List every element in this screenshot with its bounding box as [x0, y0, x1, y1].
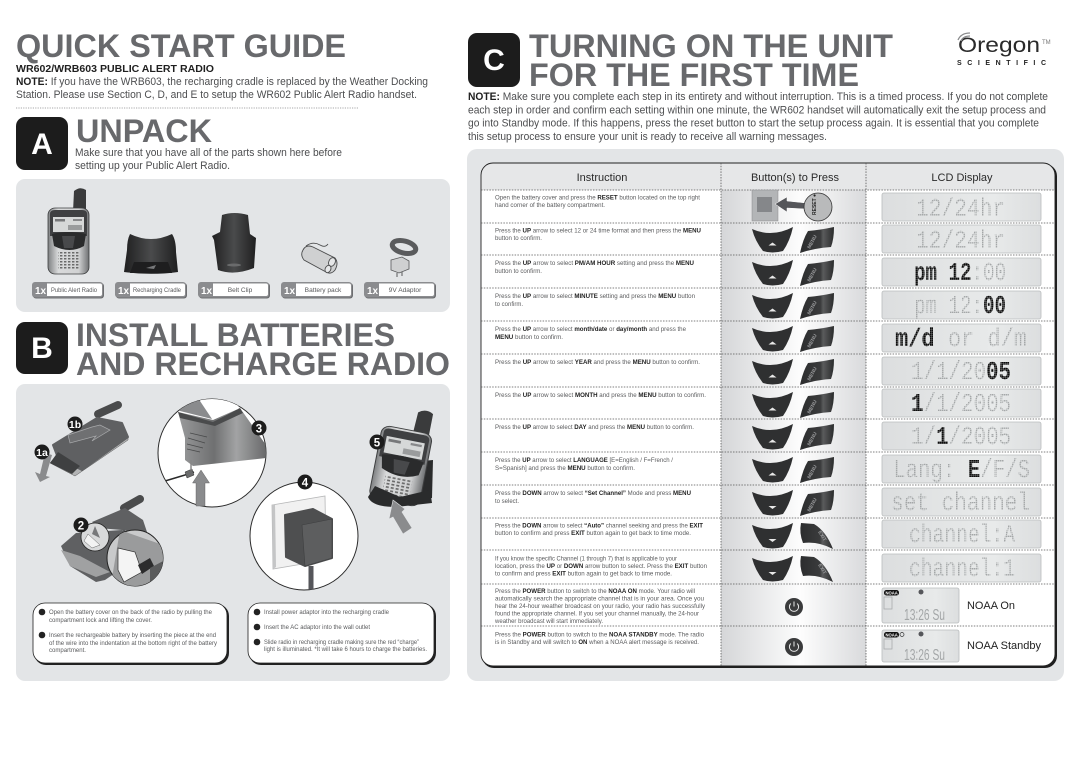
note text: each step in order and confirm each setting within one minute, the WR602 handset will automatically exit the setup process and: [468, 104, 1046, 116]
arrow: push radio: [389, 500, 412, 534]
row 6: Press the UP arrow to select YEAR and press the MENU button to confirm.: [495, 359, 700, 366]
section A intro text: Make sure that you have all of the parts shown here before: [75, 147, 342, 159]
caption: recharging cradle: [115, 282, 187, 298]
part: battery pack: [302, 243, 337, 274]
icon: power button: [785, 638, 803, 656]
caption: battery pack: Battery pack: [305, 287, 342, 294]
section C heading: [529, 28, 893, 93]
LCD: NOAA on: 13:26 Su: [904, 607, 945, 624]
icon: reset button on battery compartment: [752, 190, 832, 221]
row 2: Press the UP arrow to select 12 or 24 time format and then press the MENU: [495, 228, 701, 234]
icon: up and menu buttons: [752, 227, 834, 253]
icon: down and exit buttons: [752, 523, 833, 549]
row 10: [495, 488, 1041, 518]
subtitle: WR602/WRB603 PUBLIC ALERT RADIO: [16, 63, 214, 75]
caption: battery pack: 1x: [284, 286, 296, 297]
logo: Oregon Scientific: SCIENTIFIC: [957, 60, 1046, 67]
icon: up and menu buttons: MENU: [806, 234, 819, 250]
row 5: Press the UP arrow to select month/date or day/month and press the: [495, 326, 686, 333]
illustration: step 2 insert battery: [61, 499, 165, 590]
icon: up and menu buttons: [752, 424, 834, 450]
illustration: step 3 cradle connector: [158, 398, 268, 507]
row 7: [495, 389, 1041, 419]
badge: 3: 3: [256, 424, 262, 436]
note text: go into Standby mode. If this happens, press the reset button to start the setup process again. It is essential that you complete: [468, 118, 1039, 130]
LCD: NOAA standby: [882, 630, 959, 664]
icon: up and menu buttons: [752, 326, 834, 352]
table header: [577, 172, 993, 184]
LCD: channel 1: channel:1: [909, 554, 1015, 584]
row 3: [495, 258, 1041, 288]
icon: up and menu buttons: [752, 457, 834, 483]
panel: setup steps: [467, 149, 1064, 681]
icon: down and menu buttons: [752, 490, 834, 516]
row 2: button to confirm.: [495, 235, 542, 242]
row 13: Press the POWER button to switch to the NOAA ON mode. Your radio will: [495, 588, 695, 595]
table header: Button(s) to Press: [751, 172, 840, 184]
title: QUICK START GUIDE: [16, 28, 346, 64]
badge: 5: 5: [374, 438, 381, 450]
row 9: Press the UP arrow to select LANGUAGE [E=English / F=French /: [495, 457, 673, 464]
row 4: Press the UP arrow to select MINUTE setting and press the MENU button: [495, 293, 695, 300]
instructions box: steps 1-2: Open the battery cover on the back of the radio by pulling the: [49, 609, 212, 616]
row 13: [494, 588, 1015, 625]
illustration: step 1 open cover: [34, 405, 128, 482]
section C badge: C: [483, 44, 505, 77]
icon: down and exit buttons: EXIT: [816, 530, 827, 542]
row 7: Press the UP arrow to select MONTH and press the MENU button to confirm.: [495, 392, 706, 399]
LCD: NOAA on: NOAA: [886, 590, 898, 596]
icon: up and menu buttons: [752, 392, 834, 418]
caption: 9V adaptor: 1x: [367, 286, 379, 297]
note text: [468, 91, 1048, 143]
panel: battery installation: [16, 384, 450, 681]
caption: public alert radio: 1x: [35, 286, 47, 297]
panel: parts list: [16, 179, 450, 312]
badge: 4: 4: [302, 478, 309, 490]
row 1: hand corner of the battery compartment.: [495, 202, 605, 209]
row 11: [495, 520, 1041, 550]
instructions box: steps 1-2: [33, 603, 229, 665]
row 5: MENU button to confirm.: [495, 334, 563, 341]
row 11: button to confirm and press EXIT button again to get back to time mode.: [495, 530, 691, 537]
section B heading: [76, 317, 450, 382]
LCD: pm 12:00: [882, 258, 1041, 288]
row 13: hear the 24-hour weather broadcast on your radio, your radio has successfully: [495, 603, 706, 610]
row 12: [495, 554, 1041, 584]
LCD: 12/24hr: [882, 225, 1041, 256]
part: belt clip: [212, 213, 256, 273]
note text: NOTE: Make sure you complete each step in its entirety and without interruption. This is a timed process. If you do not complete: [468, 91, 1048, 103]
label: NOAA On: NOAA On: [967, 600, 1015, 612]
row 8: Press the UP arrow to select DAY and press the MENU button to confirm.: [495, 424, 694, 431]
caption: recharging cradle: Recharging Cradle: [133, 287, 181, 294]
row 6: [495, 357, 1041, 387]
logo: Oregon Scientific: TM: [1042, 40, 1051, 46]
icon: reset button on battery compartment: RESET ●: [812, 194, 818, 215]
LCD: channel A: channel:A: [909, 520, 1015, 550]
row 13: automatically search the appropriate channel that is in your area. Once you: [495, 596, 704, 602]
row 3: Press the UP arrow to select PM/AM HOUR setting and press the MENU: [495, 260, 694, 267]
caption: battery pack: [281, 282, 353, 298]
icon: up and menu buttons: MENU: [806, 366, 819, 382]
section C heading: TURNING ON THE UNIT: [529, 28, 893, 64]
icon: up and menu buttons: MENU: [806, 300, 819, 316]
icon: up and menu buttons: [752, 260, 834, 286]
icon: up and menu buttons: MENU: [806, 333, 819, 349]
row 4: to confirm.: [495, 301, 523, 308]
LCD: set channel: set channel: [891, 488, 1030, 518]
section B badge: [16, 322, 68, 374]
LCD: 12/24hr: [882, 193, 1041, 224]
instructions box: steps 1-2: compartment lock and lifting the cover.: [49, 617, 152, 624]
LCD: 1/1/2005: [882, 357, 1041, 387]
LCD: NOAA standby: 13:26 Su: [904, 647, 945, 664]
section A intro text: setting up your Public Alert Radio.: [75, 160, 230, 172]
part: 9V adaptor: [391, 238, 417, 277]
row 11: Press the DOWN arrow to select “Auto” channel seeking and press the EXIT: [495, 522, 703, 530]
instructions box: steps 3-5: Insert the AC adaptor into the wall outlet: [264, 624, 370, 631]
section B badge: B: [31, 332, 53, 365]
note text: NOTE: If you have the WRB603, the recharging cradle is replaced by the Weather Docking: [16, 76, 428, 88]
section A badge: [16, 117, 68, 170]
row 1: [495, 190, 1041, 224]
row 9: [495, 455, 1041, 485]
illustration: step 4 wall adaptor: [250, 474, 358, 592]
caption: recharging cradle: 1x: [118, 286, 130, 297]
LCD: 12/24hr: 12/24hr: [916, 194, 1005, 224]
icon: up and menu buttons: MENU: [806, 464, 819, 480]
icon: up and menu buttons: MENU: [806, 267, 819, 283]
icon: down and menu buttons: MENU: [806, 497, 819, 513]
row 2: [495, 225, 1041, 256]
LCD: 1/1/2005: 1/1/2005: [911, 357, 1011, 387]
note text: this setup process to ensure your unit is ready to receive all warning messages.: [468, 131, 827, 143]
LCD: m/d or d/m: m/d or d/m: [895, 324, 1027, 354]
icon: down and exit buttons: EXIT: [816, 563, 827, 575]
row 13: weather broadcast will start immediately.: [494, 618, 603, 625]
caption: 9V adaptor: 9V Adaptor: [389, 287, 422, 294]
LCD: NOAA standby: NOAA: [886, 632, 898, 638]
row 10: to select.: [495, 498, 519, 505]
instructions box: steps 3-5: light is illuminated. *It will take 6 hours to charge the batteries.: [264, 646, 427, 653]
table header: LCD Display: [931, 172, 993, 184]
LCD: 1/1/2005: 1/1/2005: [911, 422, 1011, 452]
row 14: [495, 630, 1041, 664]
section A badge: A: [31, 128, 53, 161]
row 12: location, press the UP or DOWN arrow button to select. Press the EXIT button: [495, 563, 707, 570]
LCD: 12/24hr: 12/24hr: [916, 226, 1005, 256]
logo: Oregon Scientific: Oregon: [958, 34, 1040, 57]
part: recharging cradle: [124, 234, 178, 274]
row 10: Press the DOWN arrow to select “Set Channel” Mode and press MENU: [495, 490, 691, 497]
logo: Oregon Scientific: [957, 33, 1051, 67]
row 8: [495, 422, 1041, 452]
label: NOAA Standby: NOAA Standby: [967, 640, 1041, 652]
illustration: step 5 radio in cradle: [368, 403, 437, 534]
note text: Station. Please use Section C, D, and E to setup the WR602 Public Alert Radio handset.: [16, 89, 417, 101]
LCD: Lang E/F/S: Lang: E/F/S: [893, 455, 1030, 485]
instructions box: steps 3-5: Install power adaptor into the recharging cradle: [264, 609, 389, 616]
arrow: 1a: [35, 453, 52, 482]
row 12: If you know the specific Channel (1 through 7) that is applicable to your: [495, 556, 678, 562]
section C heading: FOR THE FIRST TIME: [529, 57, 859, 93]
row 3: button to confirm.: [495, 268, 542, 275]
caption: public alert radio: Public Alert Radio: [51, 287, 97, 294]
section A heading: UNPACK: [76, 113, 213, 149]
row 14: is in Standby and will switch to ON when a NOAA alert message is received.: [495, 639, 699, 646]
LCD: pm 12:00: pm 12:00: [914, 291, 1006, 321]
caption: belt clip: [198, 282, 270, 298]
caption: belt clip: 1x: [201, 286, 213, 297]
icon: power button: [785, 598, 803, 616]
arrow: up into cradle: [192, 470, 210, 506]
section B heading: AND RECHARGE RADIO: [76, 346, 450, 382]
icon: up and menu buttons: [752, 293, 834, 319]
section B heading: INSTALL BATTERIES: [76, 317, 395, 353]
icon: up and menu buttons: MENU: [806, 431, 819, 447]
instructions box: steps 3-5: Slide radio in recharging cradle making sure the red “charge”: [264, 639, 419, 646]
icon: up and menu buttons: [752, 359, 834, 385]
row 5: [495, 324, 1041, 354]
row 1: Open the battery cover and press the RESET button located on the top right: [495, 194, 700, 202]
section C badge: [468, 33, 520, 87]
LCD: 1/1/2005: 1/1/2005: [911, 389, 1011, 419]
table: setup steps: [481, 163, 1057, 668]
instructions box: steps 1-2: of the wire into the indentation at the bottom right of the battery: [49, 640, 218, 647]
row 4: [495, 291, 1041, 321]
part: radio: [48, 188, 89, 274]
LCD: pm 12:00: pm 12:00: [914, 258, 1006, 288]
icon: up and menu buttons: MENU: [806, 399, 819, 415]
badge: 1a: 1a: [36, 447, 48, 459]
table header: Instruction: [577, 172, 627, 184]
badge: 2: 2: [78, 520, 84, 532]
instructions box: steps 1-2: compartment.: [49, 647, 86, 654]
section A intro text: [75, 147, 342, 172]
caption: public alert radio: [32, 282, 104, 298]
icon: down and exit buttons: [752, 556, 833, 582]
row 14: Press the POWER button to switch to the NOAA STANDBY mode. The radio: [495, 632, 704, 638]
LCD: NOAA on: [882, 588, 959, 624]
instructions box: steps 3-5: [248, 603, 436, 665]
LCD: pm 12:00: [882, 291, 1041, 321]
row 13: found the appropriate channel. If you set your channel manually, the 24-hour: [495, 610, 700, 618]
instructions box: steps 1-2: Insert the rechargeable battery by inserting the piece at the end: [49, 632, 216, 639]
caption: belt clip: Belt Clip: [228, 287, 253, 294]
row 9: S=Spanish] and press the MENU button to confirm.: [495, 465, 635, 472]
note text: [16, 76, 428, 101]
badge: 1b: 1b: [69, 419, 81, 431]
caption: 9V adaptor: [364, 282, 436, 298]
row 12: to confirm and press EXIT button again to get back to time mode.: [495, 570, 672, 578]
